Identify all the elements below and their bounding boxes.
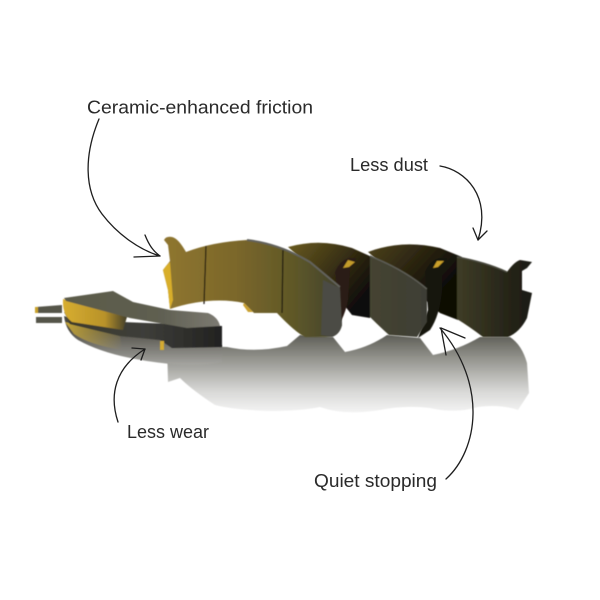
grey end face <box>321 280 342 337</box>
bracket <box>418 258 447 338</box>
clip <box>160 341 164 350</box>
rim <box>370 256 427 289</box>
top friction face <box>64 291 220 328</box>
arrow: Ceramic-enhanced friction <box>88 119 160 257</box>
back plate <box>368 244 470 320</box>
label: Quiet stopping: Quiet stopping <box>314 471 437 491</box>
flat brake pad (left) <box>35 291 222 350</box>
back plate <box>288 243 372 318</box>
top rim <box>247 240 340 287</box>
bracket <box>330 258 356 336</box>
yellow highlight <box>343 260 355 268</box>
reflection of standing brake pads <box>167 335 529 412</box>
reflection of flat brake pad <box>64 316 222 365</box>
brake pad 1 (front) <box>163 237 342 337</box>
friction face <box>370 256 427 337</box>
yellow under arch <box>243 303 253 312</box>
label: Ceramic-enhanced friction: Ceramic-enhanced friction <box>87 98 313 118</box>
friction face <box>457 257 532 337</box>
brake pad 3 (rear) <box>368 244 532 338</box>
yellow side <box>63 299 127 330</box>
brake pad 2 (middle) <box>288 243 427 337</box>
rim <box>457 257 507 272</box>
arrow: Less dust <box>440 166 487 240</box>
label: Less dust: Less dust <box>350 155 428 175</box>
arrow: Less wear <box>114 348 145 422</box>
label: Less wear: Less wear <box>127 422 209 442</box>
friction face <box>163 237 342 337</box>
yellow edge <box>163 262 173 309</box>
mounting tabs <box>36 305 62 323</box>
grooves <box>204 246 283 313</box>
arrow: Quiet stopping <box>440 328 473 479</box>
dark underside <box>64 312 222 348</box>
yellow highlight <box>433 261 444 268</box>
